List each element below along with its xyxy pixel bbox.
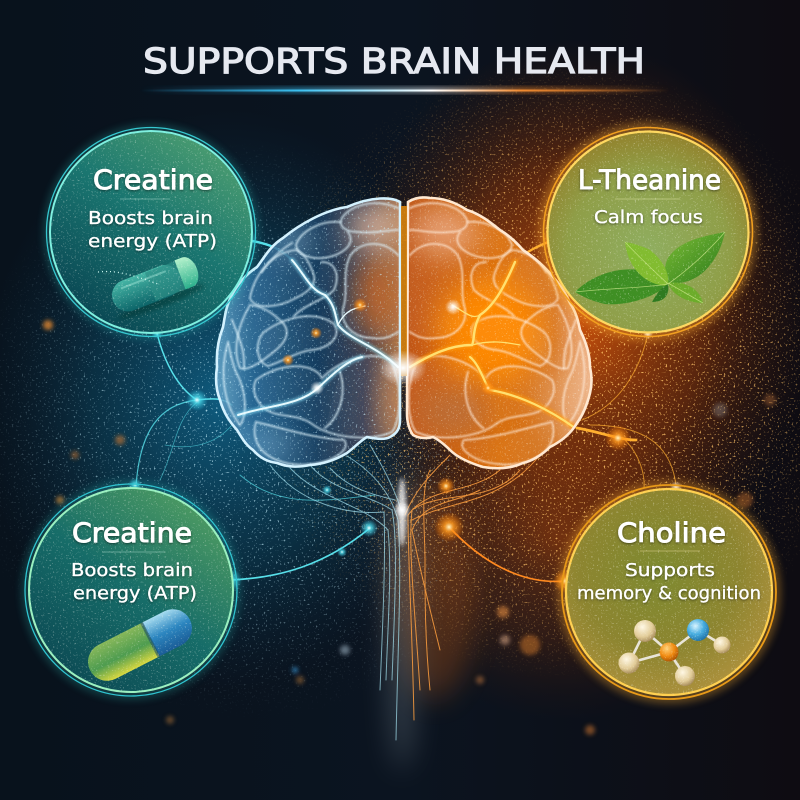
description: energy (ATP) xyxy=(73,583,197,604)
brain folds xyxy=(224,203,584,465)
brain xyxy=(214,196,593,470)
left hemisphere xyxy=(217,200,399,466)
panel speckles xyxy=(30,132,772,694)
stem fibres xyxy=(270,445,540,740)
description: energy (ATP) xyxy=(88,231,217,252)
panel: Choline xyxy=(557,480,781,704)
title underline xyxy=(140,87,670,93)
description: Calm focus xyxy=(594,207,703,228)
connector lines xyxy=(136,240,676,581)
right hemisphere xyxy=(408,198,590,467)
icon: capsule xyxy=(81,603,199,687)
icon: molecule xyxy=(618,619,730,686)
glowing nodes xyxy=(128,228,682,593)
brain outline xyxy=(216,197,592,468)
icon: leaves xyxy=(575,232,725,304)
description: memory & cognition xyxy=(577,583,761,604)
icon: capsule xyxy=(106,254,206,323)
description: Boosts brain xyxy=(71,560,193,581)
description: Boosts brain xyxy=(88,208,213,229)
heading: Creatine xyxy=(93,165,213,196)
description xyxy=(577,560,761,604)
panel: Creatine bottom left xyxy=(21,480,241,700)
panel: Creatine top left xyxy=(43,124,259,340)
description xyxy=(71,560,197,604)
panel: L-Theanine xyxy=(538,122,758,342)
heading: Creatine xyxy=(72,518,192,549)
bokeh lights xyxy=(43,320,776,735)
midline xyxy=(401,206,407,376)
title: SUPPORTS BRAIN HEALTH xyxy=(143,42,645,82)
neural veins xyxy=(238,260,575,428)
description xyxy=(88,208,217,252)
heading: Choline xyxy=(617,518,726,549)
heading: L-Theanine xyxy=(578,165,721,196)
description: Supports xyxy=(625,560,715,581)
